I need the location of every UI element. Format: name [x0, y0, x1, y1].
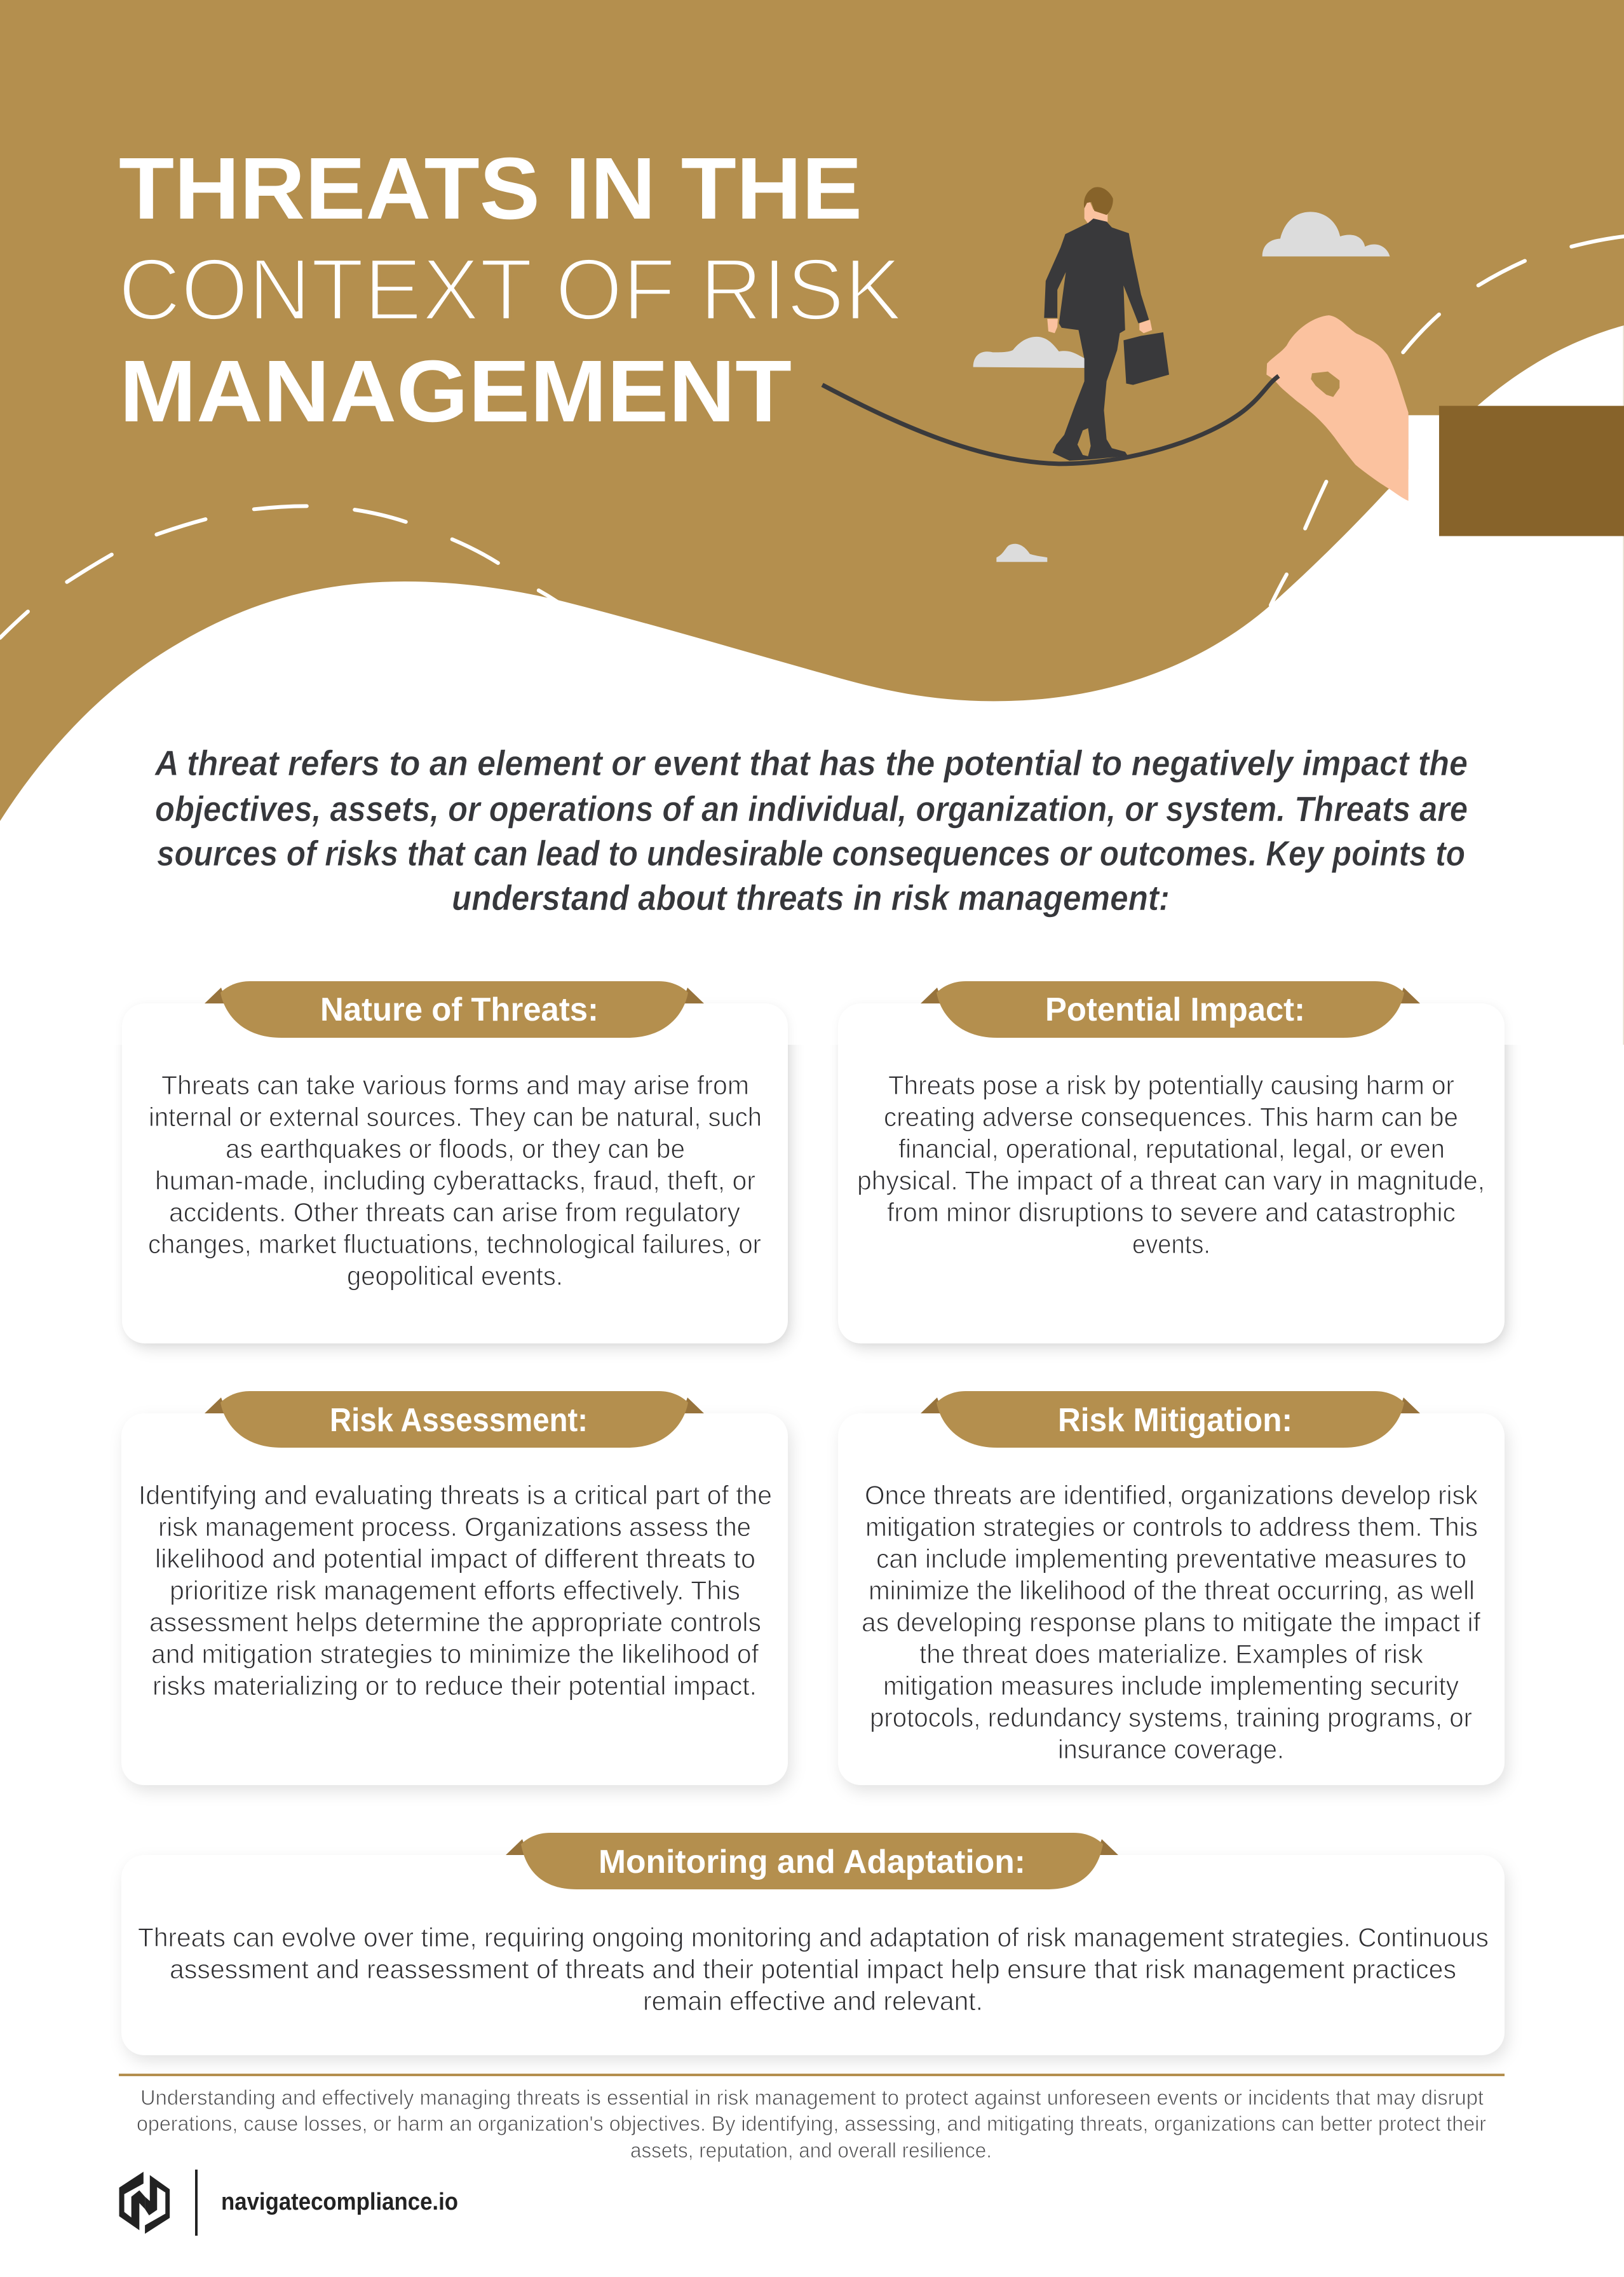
text: Nature of Threats body: geopolitical events.	[347, 1261, 563, 1291]
intro paragraph: objectives, assets, or operations of an individual, organization, or system. Threats are	[155, 789, 1468, 829]
divider	[195, 2170, 198, 2236]
text: Monitoring and Adaptation body	[138, 1922, 1489, 2016]
text: Nature of Threats body	[148, 1070, 762, 1291]
text: Risk Assessment body: likelihood and potential impact of different threats to	[155, 1544, 755, 1574]
text: Nature of Threats body: Threats can take various forms and may arise from	[161, 1070, 749, 1100]
brand name: navigatecompliance.io	[221, 2189, 458, 2215]
footer text	[137, 2086, 1486, 2162]
icon: businessman	[1044, 187, 1169, 461]
logo: navigatecompliance.io	[119, 2170, 458, 2236]
text: Monitoring and Adaptation body: Threats can evolve over time, requiring ongoing monitoring and adaptation of risk management strategies. Continuous	[138, 1922, 1489, 1952]
title	[118, 140, 902, 440]
text: Nature of Threats body: accidents. Other threats can arise from regulatory	[169, 1197, 740, 1227]
dashed road: left	[0, 506, 558, 638]
title: MANAGEMENT	[119, 343, 792, 440]
text: Risk Assessment body	[139, 1480, 772, 1701]
banner: Monitoring and Adaptation	[506, 1833, 1118, 1889]
heading: Risk Assessment: Risk Assessment:	[330, 1402, 588, 1439]
icon: white shirt cuff	[1409, 415, 1440, 509]
text: Risk Mitigation body: as developing response plans to mitigate the impact if	[862, 1607, 1480, 1637]
heading: Risk Mitigation: Risk Mitigation:	[1058, 1402, 1292, 1439]
icon: cloud right	[1262, 212, 1390, 257]
text: Potential Impact body	[857, 1070, 1485, 1259]
text: Potential Impact body: financial, operational, reputational, legal, or even	[898, 1134, 1445, 1164]
text: Risk Assessment body: risk management process. Organizations assess the	[158, 1512, 751, 1542]
banner: Nature of Threats	[205, 981, 704, 1038]
panel: Monitoring and Adaptation	[121, 1833, 1505, 2055]
text: Risk Mitigation body: mitigation strategies or controls to address them. This	[865, 1512, 1478, 1542]
illustration: tightrope walker held by a hand	[822, 187, 1624, 562]
text: Risk Mitigation body: protocols, redundancy systems, training programs, or	[870, 1703, 1472, 1732]
footer text: assets, reputation, and overall resilience.	[630, 2138, 992, 2162]
icon: rope	[822, 376, 1278, 464]
heading: Potential Impact: Potential Impact:	[1045, 991, 1305, 1028]
icon: suit sleeve	[1439, 406, 1624, 536]
text: Potential Impact body: physical. The impact of a threat can vary in magnitude,	[857, 1166, 1485, 1195]
text: Risk Assessment body: prioritize risk management efforts effectively. This	[170, 1575, 740, 1605]
intro paragraph	[154, 743, 1468, 918]
text: Nature of Threats body: changes, market fluctuations, technological failures, or	[148, 1229, 761, 1259]
panel: Nature of Threats	[122, 981, 788, 1343]
text: Monitoring and Adaptation body: remain effective and relevant.	[643, 1986, 983, 2016]
title: CONTEXT OF RISK	[118, 241, 902, 339]
banner: Risk Assessment	[205, 1391, 704, 1448]
text: Potential Impact body: events.	[1132, 1229, 1210, 1259]
text: Risk Mitigation body: the threat does materialize. Examples of risk	[919, 1639, 1424, 1669]
text: Risk Assessment body: risks materializing or to reduce their potential impact.	[152, 1671, 757, 1701]
text: Risk Assessment body: and mitigation strategies to minimize the likelihood of	[151, 1639, 759, 1669]
banner: Potential Impact	[921, 981, 1420, 1038]
icon: small cloud	[996, 544, 1047, 562]
text: Risk Mitigation body: Once threats are identified, organizations develop risk	[865, 1480, 1479, 1510]
icon: cloud left	[973, 337, 1086, 368]
hero background: gold wave	[0, 0, 1624, 821]
text: Monitoring and Adaptation body: assessment and reassessment of threats and their potential impact help ensure that risk management practices	[170, 1954, 1456, 1984]
text: Potential Impact body: creating adverse consequences. This harm can be	[884, 1102, 1458, 1132]
text: Risk Mitigation body: can include implementing preventative measures to	[876, 1544, 1466, 1574]
footer text: Understanding and effectively managing threats is essential in risk management to protect against unforeseen events or incidents that may disrupt	[140, 2086, 1484, 2109]
text: Risk Assessment body: assessment helps determine the appropriate controls	[149, 1607, 761, 1637]
text: Nature of Threats body: internal or external sources. They can be natural, such	[149, 1102, 762, 1132]
heading: Monitoring and Adaptation: Monitoring and Adaptation:	[599, 1844, 1025, 1880]
panel: Potential Impact	[838, 981, 1505, 1343]
intro paragraph: sources of risks that can lead to undesirable consequences or outcomes. Key points to	[157, 833, 1465, 873]
dashed road: right	[1271, 236, 1624, 605]
text: Nature of Threats body: as earthquakes or floods, or they can be	[226, 1134, 685, 1164]
banner: Risk Mitigation	[921, 1391, 1420, 1448]
text: Potential Impact body: Threats pose a risk by potentially causing harm or	[888, 1070, 1454, 1100]
footer text: operations, cause losses, or harm an organization's objectives. By identifying, assessing, and mitigating threats, organizations can better protect their	[137, 2112, 1486, 2135]
title: THREATS IN THE	[119, 140, 862, 238]
icon: hand	[1266, 315, 1409, 501]
text: Potential Impact body: from minor disruptions to severe and catastrophic	[887, 1197, 1456, 1227]
text: Risk Mitigation body: minimize the likelihood of the threat occurring, as well	[869, 1575, 1475, 1605]
text: Risk Mitigation body: mitigation measures include implementing security	[883, 1671, 1459, 1701]
icon: hand finger gap	[1311, 372, 1339, 397]
intro paragraph: A threat refers to an element or event that has the potential to negatively impact the	[154, 743, 1468, 783]
intro paragraph: understand about threats in risk management:	[452, 878, 1170, 918]
panel: Risk Assessment	[121, 1391, 788, 1785]
panel: Risk Mitigation	[838, 1391, 1505, 1785]
text: Risk Mitigation body: insurance coverage.	[1058, 1734, 1284, 1764]
heading: Nature of Threats: Nature of Threats:	[320, 991, 599, 1028]
icon: hexagon logo mark	[119, 2172, 170, 2234]
text: Risk Mitigation body	[862, 1480, 1480, 1764]
text: Nature of Threats body: human-made, including cyberattacks, fraud, theft, or	[155, 1166, 755, 1195]
text: Risk Assessment body: Identifying and evaluating threats is a critical part of the	[139, 1480, 772, 1510]
